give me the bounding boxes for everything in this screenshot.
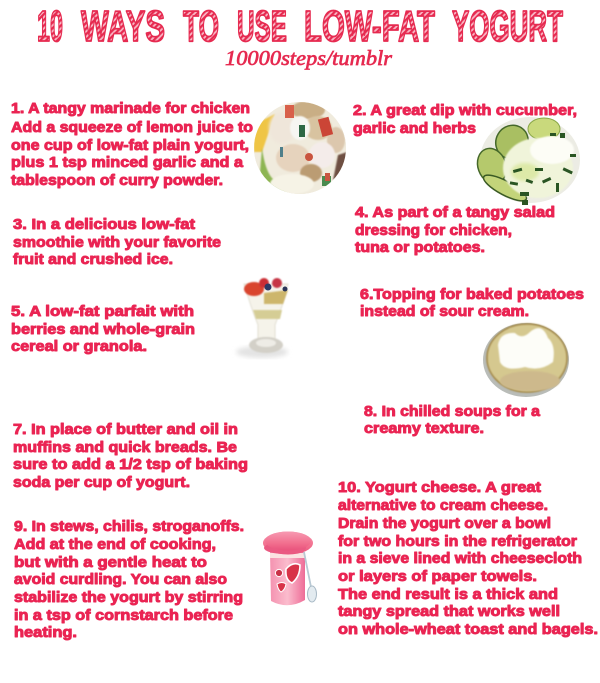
tip 4: salad dressing xyxy=(355,205,555,256)
tip 7: baking: soda per cup of yogurt. xyxy=(13,475,190,491)
title: LOW-FAT xyxy=(304,2,435,51)
icon: baked potato photo xyxy=(483,323,569,397)
tip 3: smoothie: 3. In a delicious low-fat xyxy=(13,217,195,233)
tip 2: dip xyxy=(353,103,577,137)
tip 1: marinade: Add a squeeze of lemon juice to xyxy=(11,120,253,136)
tip 3: smoothie: smoothie with your favorite xyxy=(13,235,221,251)
tip 7: baking xyxy=(13,422,248,491)
tip 6: baked potato topping: 6.Topping for baked potatoes xyxy=(360,287,584,303)
tip 4: salad dressing: 4. As part of a tangy salad xyxy=(355,205,555,221)
tip 10: yogurt cheese: 10. Yogurt cheese. A great xyxy=(338,480,541,496)
icon: parfait glass xyxy=(236,278,288,358)
tip 1: marinade xyxy=(11,101,253,189)
tip 9: stews: but with a gentle heat to xyxy=(14,555,207,571)
tip 9: stews: stabilize the yogurt by stirring xyxy=(14,590,243,606)
tip 4: salad dressing: tuna or potatoes. xyxy=(355,240,485,256)
tip 9: stews: in a tsp of cornstarch before xyxy=(14,608,233,624)
tip 5: parfait xyxy=(11,304,195,355)
tip 6: baked potato topping xyxy=(360,287,584,320)
title: TO xyxy=(183,2,219,51)
tip 10: yogurt cheese: tangy spread that works well xyxy=(338,604,560,620)
tip 7: baking: 7. In place of butter and oil in xyxy=(13,422,238,438)
tip 9: stews: heating. xyxy=(14,625,77,641)
tip 1: marinade: plus 1 tsp minced garlic and a xyxy=(11,155,244,171)
tip 3: smoothie xyxy=(13,217,221,268)
tip 9: stews: Add at the end of cooking, xyxy=(14,537,216,553)
title: 10 xyxy=(37,2,63,51)
tip 8: chilled soups xyxy=(364,404,541,437)
tip 9: stews: 9. In stews, chilis, stroganoffs. xyxy=(14,519,244,535)
tip 8: chilled soups: creamy texture. xyxy=(364,421,484,437)
tip 9: stews xyxy=(14,519,244,641)
tip 8: chilled soups: 8. In chilled soups for a xyxy=(364,404,541,420)
subtitle: credit: 10000steps/tumblr xyxy=(225,46,393,70)
tip 1: marinade: one cup of low-fat plain yogurt, xyxy=(11,138,249,154)
tip 10: yogurt cheese: on whole-wheat toast and bagels. xyxy=(338,622,598,638)
tip 3: smoothie: fruit and crushed ice. xyxy=(13,252,173,268)
tip 2: dip: garlic and herbs xyxy=(353,121,476,137)
tip 5: parfait: cereal or granola. xyxy=(11,339,147,355)
tip 10: yogurt cheese: The end result is a thick and xyxy=(338,587,558,603)
icon: strawberry yogurt cup xyxy=(263,532,316,605)
title: WAYS xyxy=(81,2,165,51)
tip 1: marinade: 1. A tangy marinade for chicken xyxy=(11,101,250,117)
tip 5: parfait: 5. A low-fat parfait with xyxy=(11,304,194,320)
tip 5: parfait: berries and whole-grain xyxy=(11,322,195,338)
icon: cucumber dip photo xyxy=(473,117,580,205)
tip 10: yogurt cheese: Drain the yogurt over a bowl xyxy=(338,516,551,532)
tip 1: marinade: tablespoon of curry powder. xyxy=(11,173,223,189)
tip 10: yogurt cheese: or layers of paper towels. xyxy=(338,569,537,585)
tip 4: salad dressing: dressing for chicken, xyxy=(355,223,512,239)
tip 6: baked potato topping: instead of sour cream. xyxy=(360,304,529,320)
tip 7: baking: sure to add a 1/2 tsp of baking xyxy=(13,457,248,473)
tip 10: yogurt cheese: for two hours in the refrigerator xyxy=(338,534,577,550)
title xyxy=(37,2,563,51)
tip 9: stews: avoid curdling. You can also xyxy=(14,572,227,588)
tip 2: dip: 2. A great dip with cucumber, xyxy=(353,103,577,119)
tip 10: yogurt cheese: in a sieve lined with cheesecloth xyxy=(338,551,582,567)
tip 10: yogurt cheese: alternative to cream cheese. xyxy=(338,498,548,514)
tip 7: baking: muffins and quick breads. Be xyxy=(13,440,237,456)
title: USE xyxy=(237,2,287,51)
icon: chicken salad photo xyxy=(253,100,347,196)
tip 10: yogurt cheese xyxy=(338,480,598,638)
